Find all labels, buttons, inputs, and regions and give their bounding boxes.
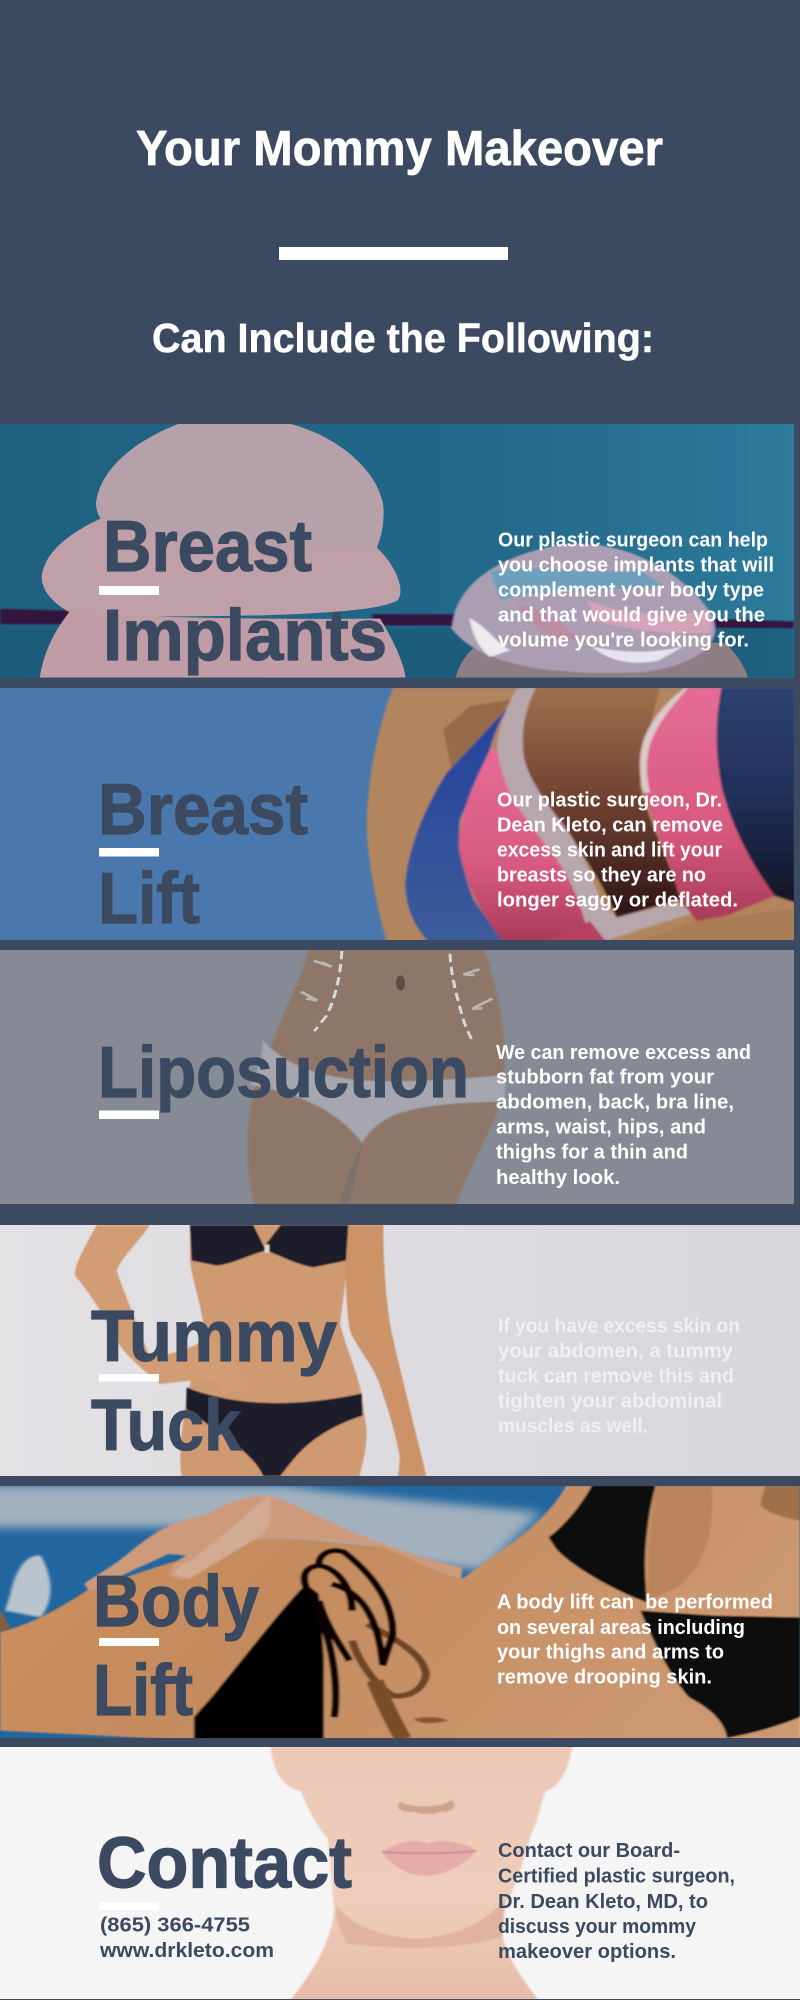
contact details: (865) 366-4755 <box>100 1914 250 1936</box>
text: body lift description: on several areas including <box>497 1616 745 1639</box>
text: contact description <box>498 1839 735 1963</box>
heading: Tummy Tuck: Tuck <box>91 1386 242 1466</box>
heading: Breast Implants: Breast <box>103 507 312 587</box>
text: liposuction description: We can remove excess and <box>496 1041 751 1064</box>
text: implants description <box>498 528 774 651</box>
heading: Body Lift <box>96 1572 260 1716</box>
photo: implants <box>0 424 794 679</box>
text: lift description: Dean Kleto, can remove <box>497 813 723 836</box>
text: lift description: excess skin and lift your <box>497 838 722 861</box>
text: contact description: makeover options. <box>498 1940 676 1963</box>
photo: reclining body in black bikini <box>0 1486 800 1739</box>
panel: breast lift <box>0 688 795 942</box>
text: liposuction description: healthy look. <box>496 1166 620 1189</box>
text: contact description: Dr. Dean Kleto, MD, to <box>498 1890 708 1913</box>
heading: Breast Lift: Breast <box>98 770 308 850</box>
title divider <box>279 247 508 260</box>
photo: lower face and neck <box>270 1747 572 1999</box>
text: implants description: you choose implants that will <box>498 553 774 576</box>
text: tummy tuck description: tuck can remove this and <box>498 1364 734 1388</box>
text: implants description: and that would give you the <box>498 603 765 626</box>
heading: Body Lift: Body <box>93 1562 259 1642</box>
subtitle: Can Include the Following: <box>152 315 654 361</box>
title: Your Mommy Makeover <box>136 122 663 176</box>
photo: torso in black bikini <box>75 1225 426 1477</box>
text: liposuction description: thighs for a thin and <box>496 1141 688 1164</box>
text: body lift description: A body lift can be performed <box>497 1591 773 1614</box>
text: implants description: complement your body type <box>498 578 764 601</box>
text: tummy tuck description: muscles as well. <box>498 1414 648 1437</box>
text: tummy tuck description: your abdomen, a tummy <box>498 1340 734 1363</box>
text: contact description: discuss your mommy <box>498 1915 697 1938</box>
contact details: www.drkleto.com <box>99 1939 274 1962</box>
text: lift description: breasts so they are no <box>497 863 706 886</box>
panel: breast implants <box>0 424 794 679</box>
panel background <box>0 424 794 678</box>
panel background <box>0 950 794 1204</box>
text: liposuction description: stubborn fat from your <box>496 1066 714 1089</box>
text: tummy tuck description <box>498 1315 740 1437</box>
panel background <box>0 1225 800 1476</box>
divider <box>99 1902 159 1910</box>
heading: Liposuction: Liposuction <box>98 1033 469 1113</box>
text: contact description: Contact our Board- <box>498 1839 680 1862</box>
heading: Tummy Tuck <box>91 1310 338 1452</box>
text: liposuction description: arms, waist, hips, and <box>496 1116 706 1138</box>
text: liposuction description <box>496 1041 751 1189</box>
heading: Breast Lift <box>99 784 308 924</box>
heading: Breast Lift: Lift <box>98 859 200 939</box>
panel: tummy tuck <box>0 1225 800 1477</box>
panel background <box>0 1486 800 1738</box>
text: body lift description: remove drooping skin. <box>497 1666 712 1689</box>
text: lift description <box>497 788 738 911</box>
panel: body lift <box>0 1486 800 1739</box>
text: body lift description: your thighs and arms to <box>497 1641 724 1664</box>
heading: Contact: Contact <box>97 1824 352 1904</box>
heading: Breast Implants <box>99 507 387 676</box>
text: lift description: longer saggy or deflated. <box>497 888 738 911</box>
text: body lift description <box>497 1591 773 1689</box>
text: tummy tuck description: tighten your abdominal <box>498 1390 722 1413</box>
heading: Breast Implants: Implants <box>103 596 387 676</box>
panel: liposuction <box>0 950 794 1205</box>
text: implants description: Our plastic surgeon can help <box>498 528 768 551</box>
heading: Tummy Tuck: Tummy <box>91 1297 337 1377</box>
photo: waist with surgical markings <box>247 950 505 1205</box>
panel background <box>0 1747 800 1999</box>
text: liposuction description: abdomen, back, bra line, <box>496 1091 734 1114</box>
panel background <box>0 688 794 940</box>
text: tummy tuck description: If you have excess skin on <box>498 1315 740 1338</box>
text: contact description: Certified plastic surgeon, <box>498 1864 735 1887</box>
photo: bikini torso <box>367 688 795 942</box>
text: implants description: volume you're looking for. <box>498 628 749 651</box>
text: lift description: Our plastic surgeon, Dr. <box>497 788 722 811</box>
panel: contact <box>0 1747 800 1999</box>
heading: Body Lift: Lift <box>93 1651 193 1731</box>
contact details <box>100 1916 273 1957</box>
